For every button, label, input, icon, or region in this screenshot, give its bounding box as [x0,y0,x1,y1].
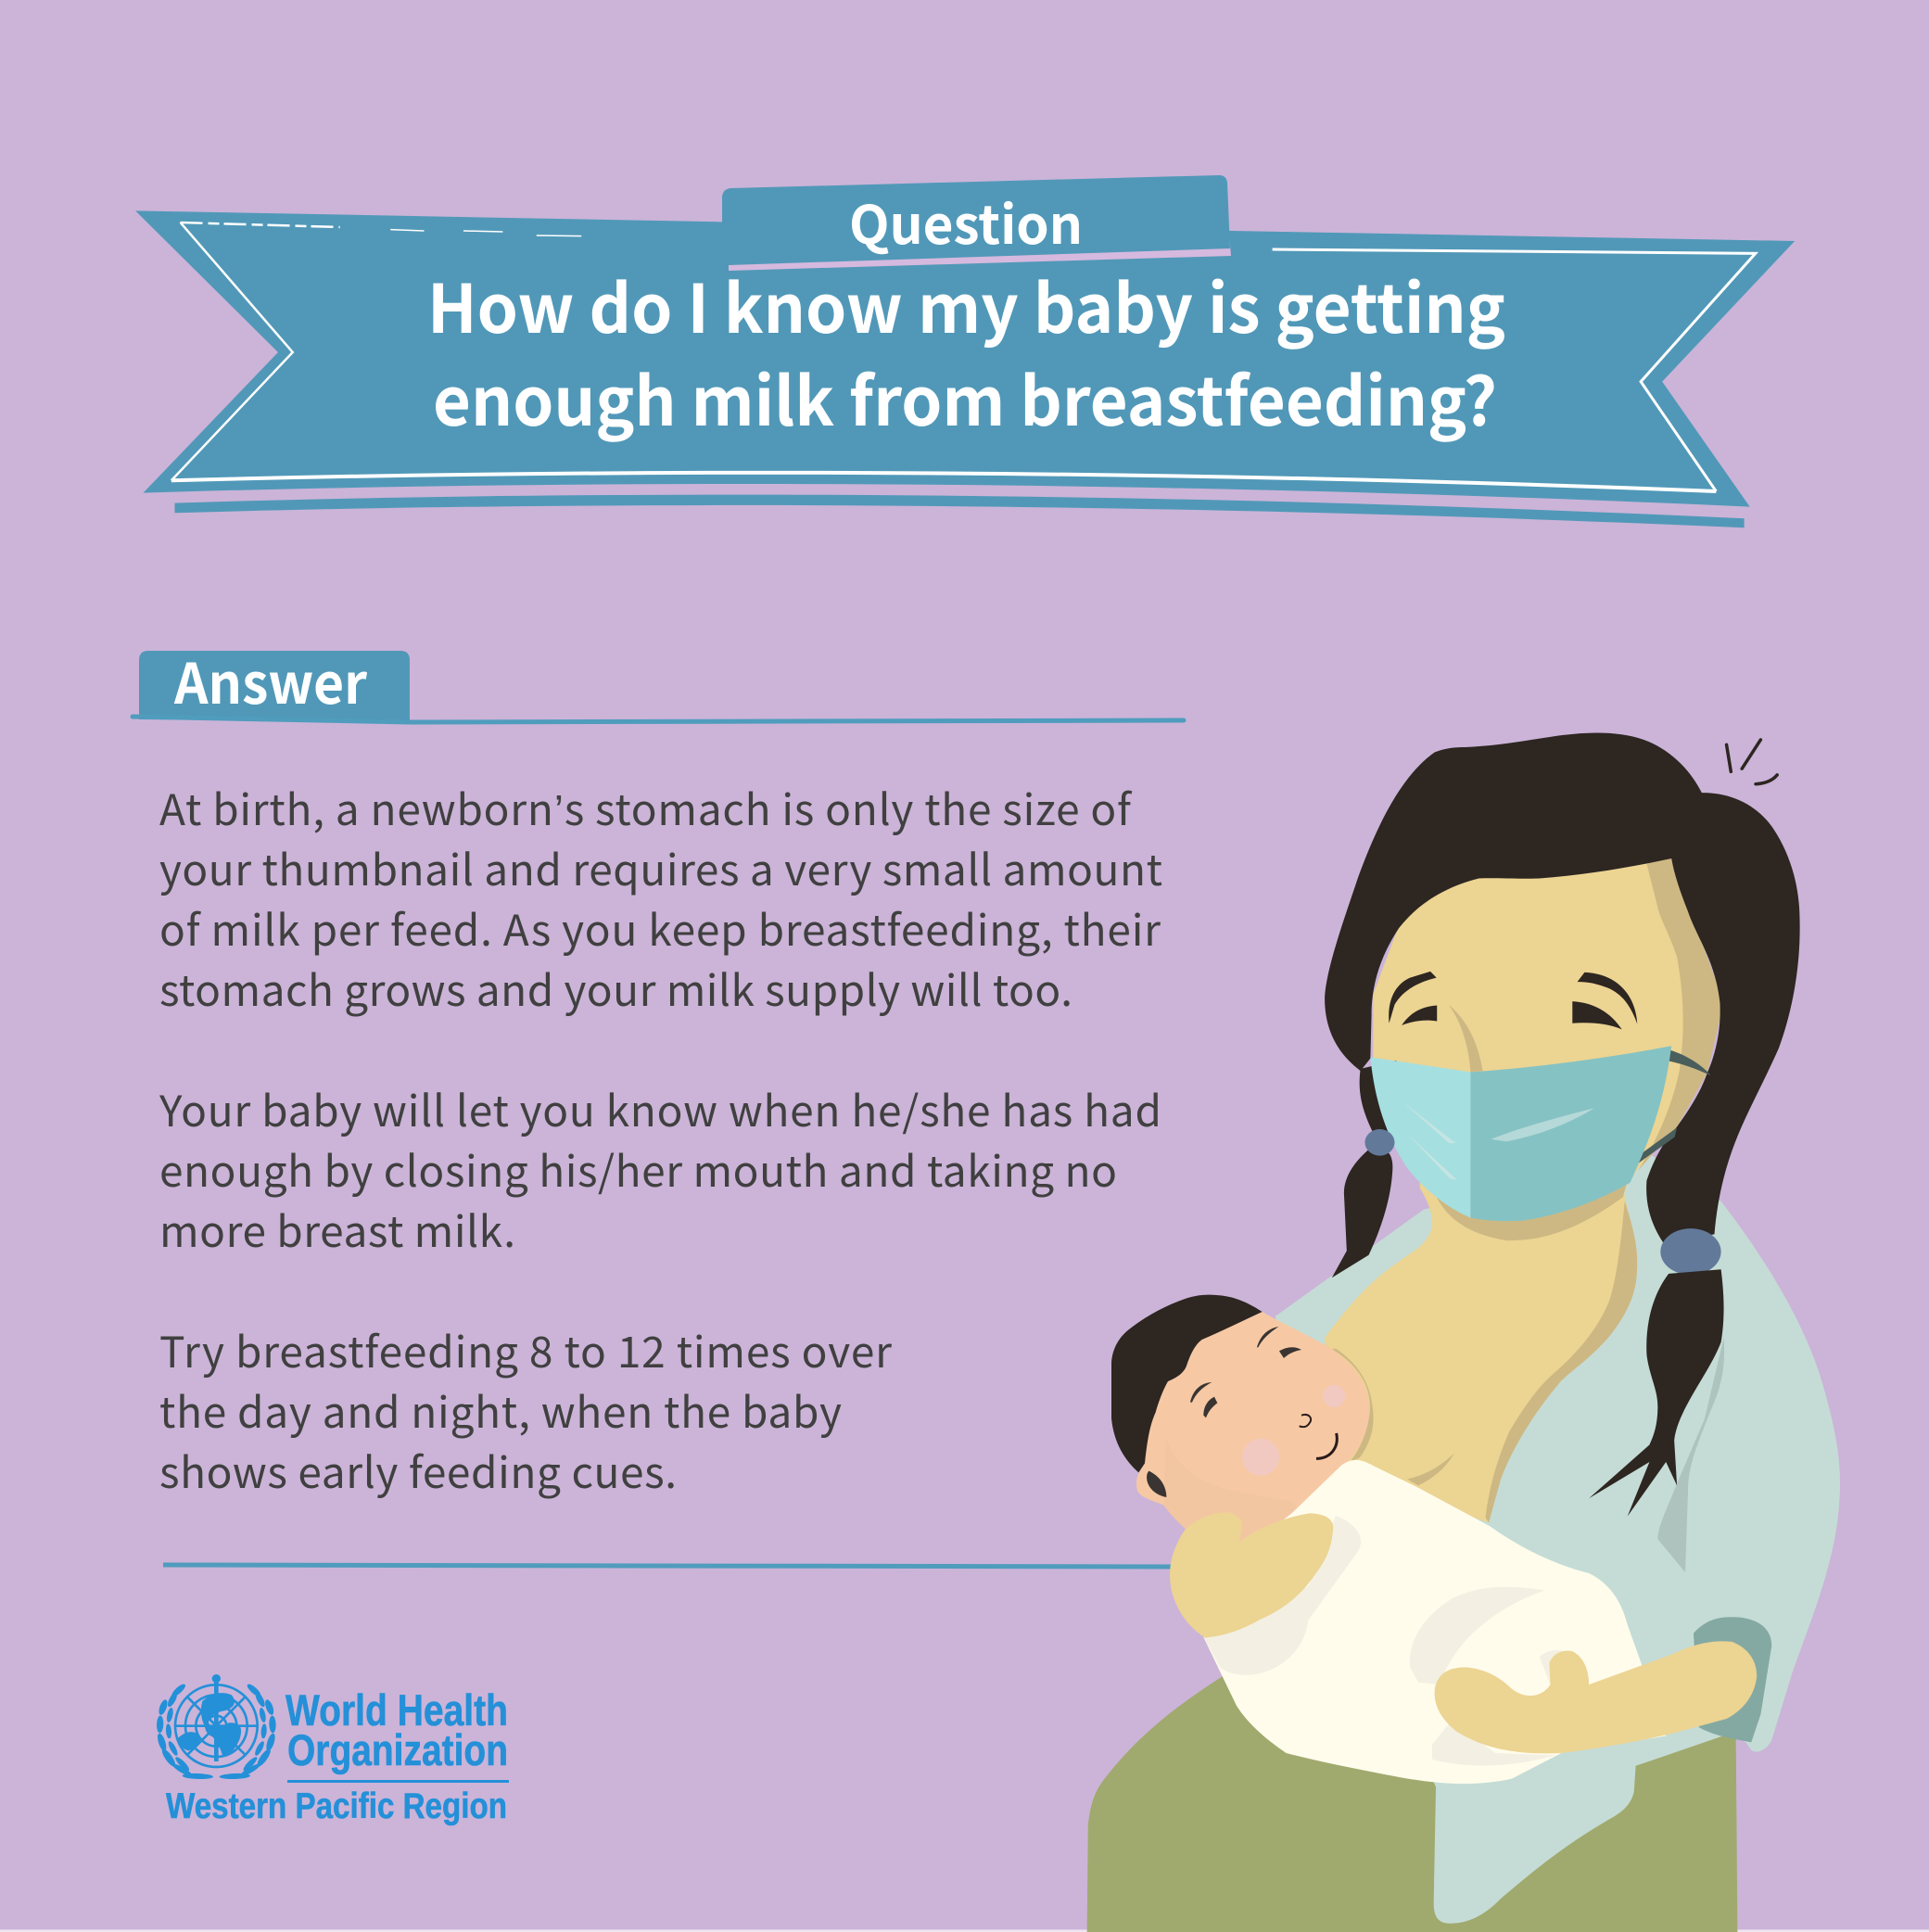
face mask [1370,1057,1470,1218]
nose line [1449,1005,1483,1072]
swaddle blanket [1203,1460,1666,1784]
paragraph: baby signals enough: enough by closing his/her mouth and taking no [159,1138,1117,1200]
illustration: mother breastfeeding baby [1087,733,1840,1932]
paragraph: newborn stomach [159,777,1162,1019]
question title: enough milk from breastfeeding? [433,348,1497,445]
baby [1111,1295,1374,1548]
paragraph: baby signals enough: Your baby will let you know when he/she has had [159,1078,1161,1139]
icon: WHO emblem [156,1674,277,1780]
mask ear loops [1666,1049,1711,1075]
face [1373,854,1720,1201]
baby head shadow [1332,1349,1374,1462]
question title [427,255,1505,445]
right eye [1572,1001,1622,1029]
answer heading [133,640,1184,722]
logo wordmark [166,1685,509,1826]
baby nose and smile [1300,1415,1311,1427]
sleeve cuff [1694,1617,1771,1742]
logo wordmark: Organization [287,1725,508,1774]
question title: How do I know my baby is getting [427,255,1505,352]
under-chin shadow [1432,1160,1633,1240]
hand and forearm [1435,1641,1757,1753]
right eyebrow [1578,972,1637,1024]
paragraph: baby signals enough: more breast milk. [159,1199,515,1260]
left hair strand [1360,1061,1396,1135]
hair [1325,733,1800,1242]
mother's head [1325,733,1800,1275]
paragraph: newborn stomach: At birth, a newborn’s stomach is only the size of [159,777,1133,838]
question tab: Question [849,184,1083,260]
paragraph: newborn stomach: of milk per feed. As you keep breastfeeding, their [159,897,1161,959]
shirt [1275,1154,1840,1924]
mother's hand supporting baby's head [1170,1513,1333,1638]
WHO logo [156,1674,509,1826]
shirt fold [1657,1338,1724,1572]
baby eyes and brows [1190,1327,1301,1417]
logo wordmark: World Health [286,1685,508,1735]
paragraph: feeding frequency: the day and night, when the baby [159,1379,842,1441]
question tab [722,175,1231,271]
baby cheeks [1242,1385,1345,1476]
left eyebrow [1389,972,1437,1023]
paragraph: newborn stomach: your thumbnail and requires a very small amount [159,837,1162,898]
left braid [1332,1150,1392,1277]
baby hair [1111,1295,1263,1472]
neck and chest [1325,1145,1637,1523]
baby ear [1147,1471,1166,1497]
paragraph: baby signals enough [159,1078,1161,1260]
baby face shade [1163,1435,1298,1548]
logo wordmark: Western Pacific Region [166,1786,507,1826]
answer heading: Answer [173,640,368,720]
paragraph: feeding frequency: Try breastfeeding 8 to 12 times over [159,1319,892,1380]
baby face [1136,1312,1370,1548]
right hair tie [1660,1228,1721,1275]
paragraph: feeding frequency [159,1319,892,1501]
right braid [1589,1269,1724,1517]
skirt [1087,1676,1737,1932]
paragraph: feeding frequency: shows early feeding cues. [159,1440,677,1501]
ribbon shape [135,210,1795,527]
question banner [135,175,1795,527]
surprise marks [1727,740,1777,784]
paragraph: newborn stomach: stomach grows and your milk supply will too. [159,958,1072,1019]
left hair tie [1364,1129,1394,1156]
left eye [1402,1006,1437,1025]
